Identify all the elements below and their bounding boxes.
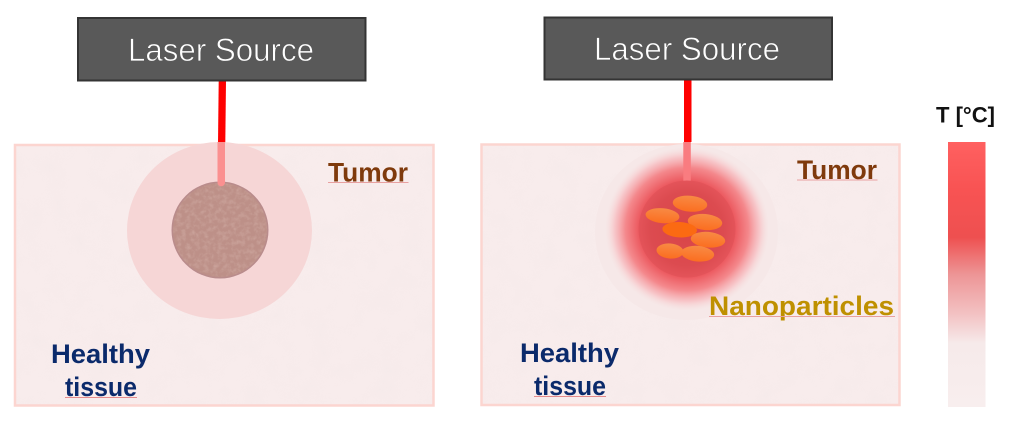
healthy tissue block [15, 145, 434, 406]
scale gradient bar [948, 142, 986, 407]
label: Healthy tissue: tissue [65, 372, 137, 402]
label: Tumor: Tumor [797, 155, 877, 185]
panel: laser without nanoparticles [15, 18, 434, 406]
label: Healthy tissue: Healthy [51, 339, 150, 369]
label: Nanoparticles: Nanoparticles [709, 291, 894, 321]
panel: laser with nanoparticles [482, 18, 900, 405]
scale title: T [°C] [936, 102, 995, 128]
beam: attenuated in tissue [218, 142, 225, 186]
laser source box [544, 18, 832, 80]
thermal glow [605, 147, 769, 311]
label: Healthy tissue: tissue [534, 371, 606, 401]
beam: incident laser [218, 81, 226, 143]
label: Healthy tissue [51, 339, 150, 402]
heated zone halo [127, 142, 312, 319]
nanoparticles cluster [645, 194, 726, 263]
laser source box: Laser Source [128, 32, 314, 68]
beam: attenuated in tissue [683, 142, 691, 182]
label: Healthy tissue: Healthy [520, 338, 619, 368]
temperature scale [936, 102, 995, 407]
healthy tissue block [482, 144, 900, 405]
laser source box: Laser Source [594, 31, 780, 67]
label: Healthy tissue [520, 338, 619, 401]
beam: incident laser [684, 80, 692, 142]
label: Tumor: Tumor [328, 158, 408, 188]
tumor with heat [638, 180, 736, 278]
tumor [172, 182, 268, 278]
faint heated zone halo [595, 144, 778, 320]
laser source box [78, 18, 366, 80]
